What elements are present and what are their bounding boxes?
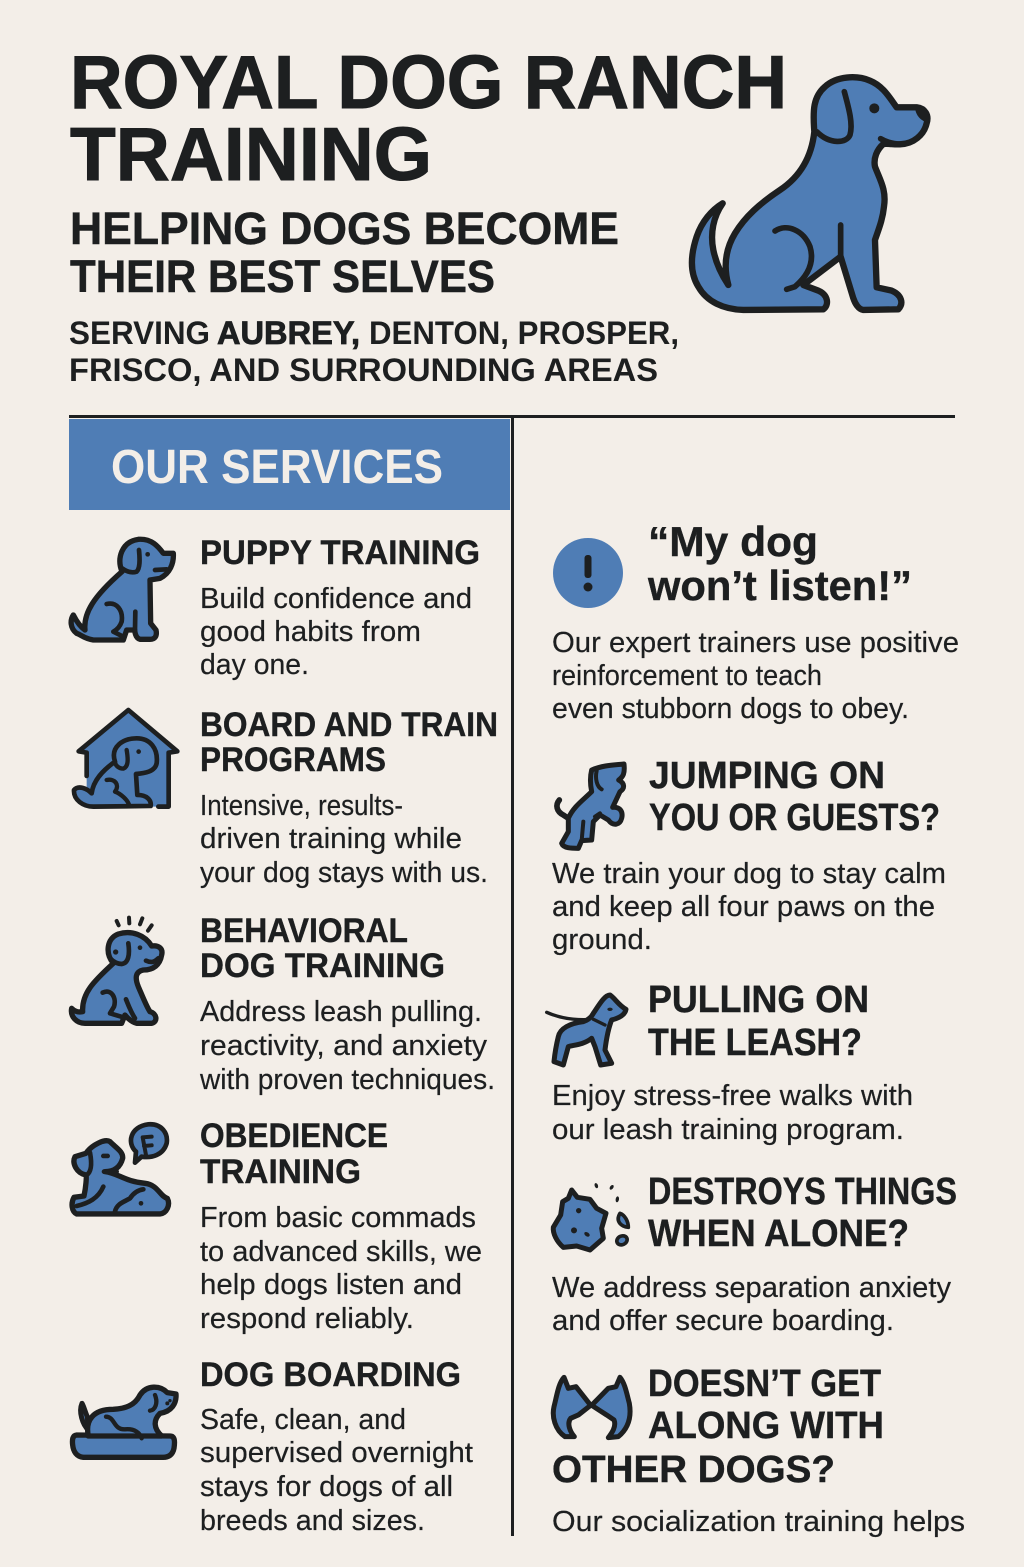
description: We train your dog to stay calm [552, 858, 946, 890]
icon: alert puppy [71, 918, 162, 1023]
panel: destroys things [552, 1171, 957, 1337]
heading: BOARD AND TRAIN [200, 706, 498, 744]
heading: DOG BOARDING [200, 1356, 461, 1394]
description [552, 858, 946, 956]
description: and offer secure boarding. [552, 1305, 894, 1337]
heading: DOG TRAINING [200, 947, 445, 985]
description: stays for dogs of all [200, 1471, 453, 1503]
subtitle [70, 203, 619, 302]
heading: TRAINING [200, 1153, 361, 1191]
description [199, 996, 495, 1096]
description [552, 1080, 913, 1146]
heading [200, 1117, 388, 1191]
icon: jumping dog [557, 764, 624, 848]
service area text: DENTON, PROSPER, [369, 315, 679, 351]
title [70, 40, 787, 196]
description: to advanced skills, we [200, 1236, 482, 1268]
description [552, 627, 959, 725]
service area text: FRISCO, AND SURROUNDING AREAS [69, 352, 658, 388]
icon: dog on leash [547, 995, 626, 1065]
description: supervised overnight [200, 1437, 473, 1469]
description: breeds and sizes. [200, 1505, 425, 1537]
heading: WHEN ALONE? [648, 1213, 909, 1255]
description [200, 1404, 473, 1537]
heading: OTHER DOGS? [552, 1449, 835, 1491]
description: and keep all four paws on the [552, 891, 935, 923]
description: ground. [552, 924, 652, 956]
description: day one. [200, 649, 309, 681]
description: Our socialization training helps [552, 1506, 965, 1538]
heading [648, 1171, 957, 1255]
description: Enjoy stress-free walks with [552, 1080, 913, 1112]
icon: torn debris [553, 1183, 629, 1250]
description: Safe, clean, and [200, 1404, 406, 1436]
heading: DOESN’T GET [648, 1363, 881, 1405]
description: We address separation anxiety [552, 1272, 951, 1304]
description: respond reliably. [200, 1303, 414, 1335]
icon: large sitting dog [692, 77, 929, 310]
panel: our services heading: OUR SERVICES [111, 441, 443, 494]
description [200, 790, 488, 889]
description: reinforcement to teach [552, 660, 822, 692]
panel: dog boarding [72, 1356, 473, 1537]
panel: jumping [552, 755, 946, 956]
heading: OBEDIENCE [200, 1117, 388, 1155]
description: Our expert trainers use positive [552, 627, 959, 659]
description: Address leash pulling. [200, 996, 482, 1028]
description: our leash training program. [552, 1114, 904, 1146]
description: driven training while [200, 823, 462, 855]
heading: won’t listen!” [647, 562, 912, 609]
title: TRAINING [70, 112, 432, 196]
service area text: SERVING [69, 315, 210, 351]
heading: PULLING ON [648, 979, 869, 1021]
subtitle: HELPING DOGS BECOME [70, 203, 619, 254]
description: Build confidence and [200, 583, 472, 615]
divider lines [69, 415, 955, 1536]
panel: obedience training [72, 1117, 482, 1335]
heading: “My dog [648, 518, 818, 565]
icon: exclamation circle [553, 538, 623, 608]
heading: BEHAVIORAL [200, 912, 408, 950]
panel: puppy training [71, 534, 480, 681]
description [200, 1202, 482, 1335]
heading [649, 755, 940, 839]
icon: dog in house [74, 710, 177, 807]
description [200, 583, 472, 681]
heading: THE LEASH? [648, 1022, 862, 1064]
heading: PROGRAMS [200, 741, 386, 779]
heading [200, 912, 445, 985]
icon: two facing dogs [553, 1377, 630, 1438]
heading: ALONG WITH [648, 1405, 884, 1447]
description: even stubborn dogs to obey. [552, 693, 909, 725]
description: reactivity, and anxiety [200, 1030, 488, 1062]
heading [647, 518, 912, 609]
panel: board and train [74, 706, 498, 889]
description: help dogs listen and [200, 1269, 462, 1301]
panel: pulling on leash [547, 979, 913, 1146]
icon: dog on bed [72, 1387, 176, 1457]
panel: won't listen [552, 518, 959, 725]
description: your dog stays with us. [200, 857, 488, 889]
heading: PUPPY TRAINING [200, 534, 480, 572]
heading [552, 1363, 884, 1491]
subtitle: THEIR BEST SELVES [70, 251, 495, 302]
description: Intensive, results- [200, 790, 403, 822]
heading [648, 979, 869, 1064]
description: with proven techniques. [199, 1064, 495, 1096]
icon: lying dog with speech bubble [72, 1124, 169, 1214]
service area text: AUBREY, [217, 315, 360, 351]
description: good habits from [200, 616, 421, 648]
heading [200, 706, 498, 779]
title: ROYAL DOG RANCH [70, 40, 787, 124]
heading: DESTROYS THINGS [648, 1171, 957, 1213]
service area text [69, 315, 679, 388]
description [552, 1272, 951, 1337]
heading: JUMPING ON [649, 755, 885, 797]
heading: YOU OR GUESTS? [649, 797, 940, 839]
description: From basic commads [200, 1202, 476, 1234]
panel: other dogs [552, 1363, 965, 1538]
panel: behavioral training [71, 912, 495, 1096]
panel: our services heading [69, 419, 510, 510]
icon: puppy [71, 539, 173, 640]
